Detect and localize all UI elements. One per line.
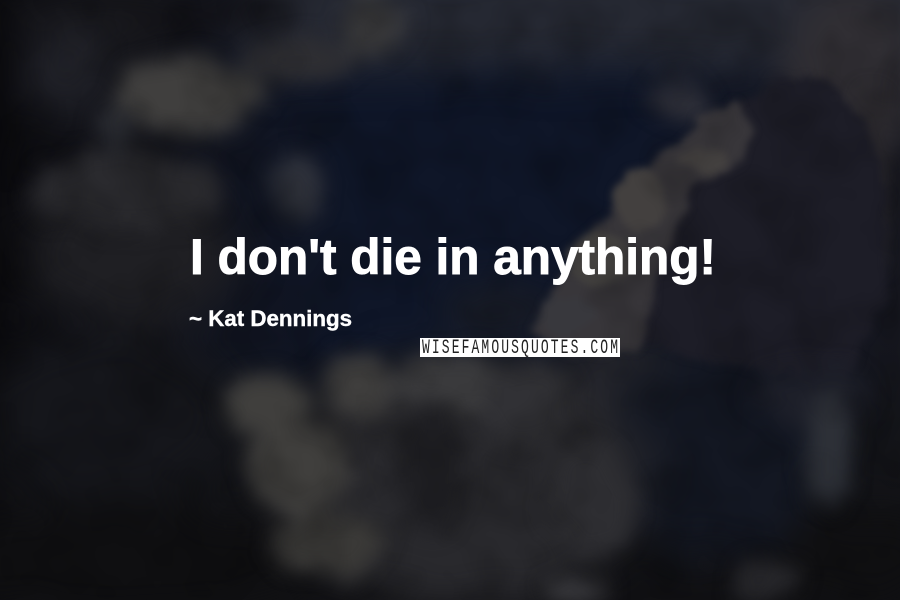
upper clouds [30, 0, 892, 270]
lower right wisps [731, 365, 865, 600]
right cloud dark mass [600, 75, 890, 390]
author attribution: ~ Kat Dennings [189, 306, 352, 331]
right cloud lit edge [530, 100, 755, 355]
watermark badge: WISEFAMOUSQUOTES.COM [422, 338, 618, 360]
lower central clouds [217, 353, 632, 600]
quote text: I don't die in anything! [190, 229, 716, 285]
lower darkening [0, 340, 900, 600]
